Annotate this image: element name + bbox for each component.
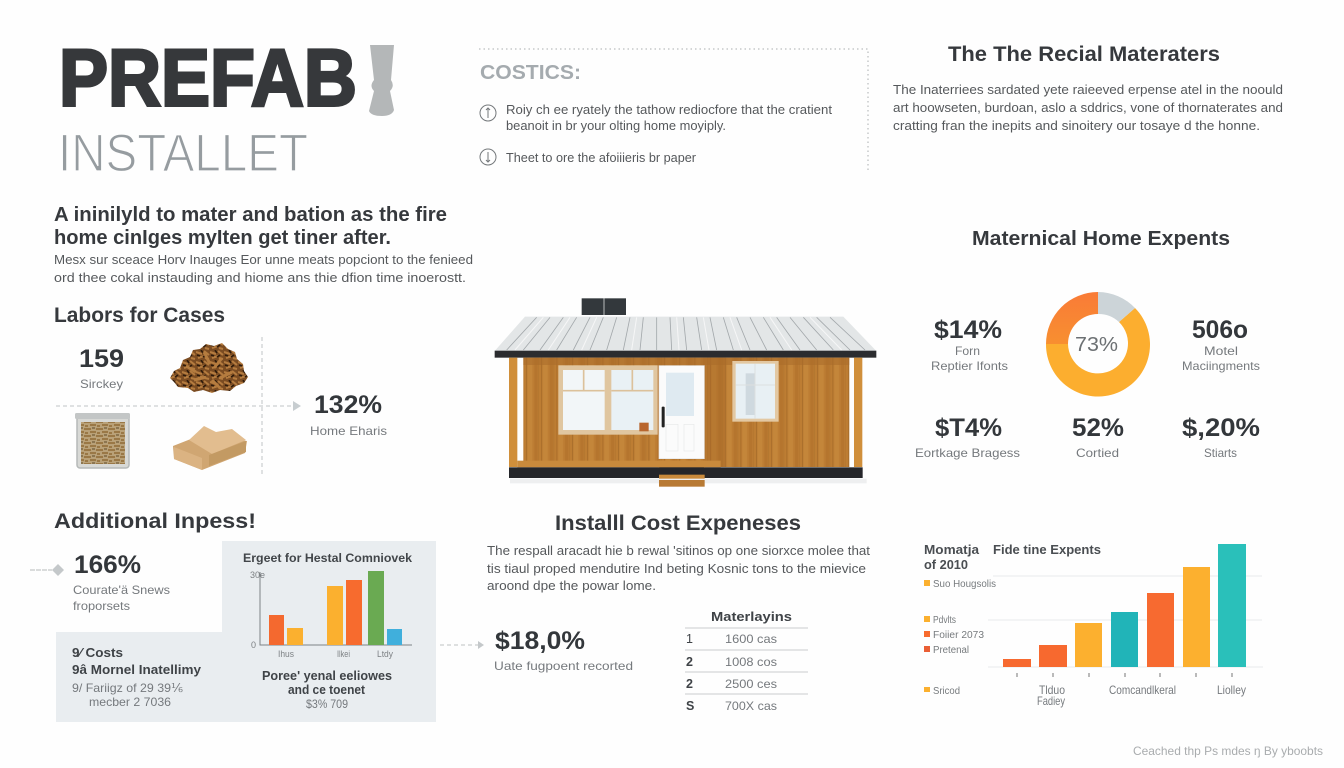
costs list: 9â Mornel Inatellimy xyxy=(72,663,201,677)
chart title: of 2010 xyxy=(924,558,968,572)
panel: additional inpess xyxy=(30,509,436,722)
stat label: Home Eharis xyxy=(310,424,387,438)
chart title: Ergeet for Hestal Comniovek xyxy=(243,551,412,565)
panel: install cost expenses xyxy=(440,511,870,713)
chart title: Fide tine Expents xyxy=(993,543,1101,557)
stat: top left: $14% xyxy=(934,316,1002,344)
heading: Installl Cost Expeneses xyxy=(555,511,801,535)
bar chart: hestal comniovek: Ilkei xyxy=(337,649,350,659)
chart caption: Poree' yenal eeliowes xyxy=(262,669,392,683)
heading: Additional Inpess! xyxy=(54,509,256,533)
stat: bottom right: $,20% xyxy=(1182,414,1260,442)
donut segment: yellow xyxy=(1046,308,1150,397)
image: wood boards xyxy=(173,426,247,470)
axis labels: Liolley xyxy=(1217,683,1246,697)
chart title xyxy=(924,543,1101,572)
arrow xyxy=(440,641,484,649)
paragraph line two: tis tiaul proped mendutire Ind beting Kosnic tons to the mievice xyxy=(487,561,866,576)
costs list: mecber 2 7036 xyxy=(89,695,171,709)
porch posts xyxy=(509,358,862,467)
icon: exclamation shaped post xyxy=(369,45,394,116)
bar chart: hestal comniovek: Ltdy xyxy=(377,649,393,659)
panel: recial materaters xyxy=(893,43,1283,133)
subtitle: INSTALLET: INSTALLET xyxy=(58,124,308,183)
legend xyxy=(924,579,996,697)
stat: top left xyxy=(931,316,1008,373)
chart title: Momatja xyxy=(924,543,980,557)
stat: top right: 506o xyxy=(1192,316,1248,344)
stat: 132%: 132% xyxy=(314,391,382,419)
bar chart: hestal comniovek: Ihus xyxy=(278,649,294,659)
legend: Foiier 2073 xyxy=(933,630,984,641)
roof xyxy=(495,317,876,351)
donut value: 73% xyxy=(1075,334,1118,356)
arrow xyxy=(293,401,301,411)
axis labels: Tlduo xyxy=(1039,683,1065,697)
costs list: 9⁄ Costs xyxy=(72,646,123,660)
stat: top left: Reptier Ifonts xyxy=(931,359,1008,373)
costs list xyxy=(72,646,201,709)
panel: labors for cases xyxy=(54,303,387,475)
image: wood chip pile xyxy=(170,343,248,393)
costics heading: COSTICS: xyxy=(480,62,581,84)
legend: Pretenal xyxy=(933,645,969,656)
image: glass jar of chips xyxy=(75,413,130,468)
roof fascia xyxy=(495,351,876,358)
stat label: Sirckey xyxy=(80,377,123,391)
stat: bottom centre: Cortied xyxy=(1076,446,1119,460)
heading: Maternical Home Expents xyxy=(972,227,1230,250)
porch deck xyxy=(517,461,721,467)
wall xyxy=(523,358,849,467)
bar chart: hestal comniovek xyxy=(243,551,412,659)
costics item one line two: beanoit in br your olting home moyiply. xyxy=(506,118,726,133)
stat: bottom centre: 52% xyxy=(1072,414,1124,442)
heading: Labors for Cases xyxy=(54,303,225,327)
stat label: Uate fugpoent recorted xyxy=(494,659,633,673)
intro heading: A ininilyld to mater and bation as the fire xyxy=(54,204,447,226)
stat: top right: Motel xyxy=(1204,344,1238,358)
costics item two: Theet to ore the afoiiieris br paper xyxy=(506,150,697,165)
legend: Suo Hougsolis xyxy=(933,579,996,590)
bar chart: hestal comniovek: 0 xyxy=(251,640,256,650)
icon: down arrow circle xyxy=(480,149,496,165)
ground shadow xyxy=(510,479,867,483)
arrow into stat xyxy=(30,564,64,576)
intro text xyxy=(54,204,473,285)
stat: bottom left xyxy=(915,414,1020,460)
legend: Pdvlts xyxy=(933,615,956,626)
intro body line one: Mesx sur sceace Horv Inauges Eor unne meats popciont to the fenieed xyxy=(54,252,473,267)
stat label line two: froporsets xyxy=(73,599,130,613)
footer credit: Ceached thp Ps mdes ŋ By yboobts xyxy=(1133,744,1323,758)
axis labels xyxy=(1037,683,1246,708)
paragraph line one: The respall aracadt hie b rewal 'sitinos op one siorxce molee that xyxy=(487,543,870,558)
stat: top right xyxy=(1182,316,1260,373)
table: materlayins: S xyxy=(686,699,694,713)
bar chart xyxy=(988,544,1263,677)
paragraph line three: cratting fran the inepits and sinoitery our tosaye d the honne. xyxy=(893,118,1260,133)
chart caption xyxy=(262,669,392,711)
panel: costics xyxy=(479,49,868,170)
house illustration xyxy=(495,298,876,487)
main window xyxy=(558,365,658,435)
donut segment: grey xyxy=(1098,292,1135,322)
chart caption: and ce toenet xyxy=(288,683,366,697)
foundation xyxy=(509,467,863,478)
table: materlayins: 1600 cas xyxy=(725,632,777,646)
axis labels: Comcandlkeral xyxy=(1109,683,1176,697)
stat: top right: Maciingments xyxy=(1182,359,1260,373)
table: materlayins: 1 xyxy=(686,632,693,646)
solar panel xyxy=(582,298,627,332)
table: materlayins: 700X cas xyxy=(725,699,777,713)
chart caption: $3% 709 xyxy=(306,697,348,711)
stat: top left: Forn xyxy=(955,344,980,358)
donut chart xyxy=(1046,292,1150,397)
stat label line one: Courate'ä Snews xyxy=(73,583,170,597)
stat: 159: 159 xyxy=(79,345,124,373)
costics item one line one: Roiy ch ee ryately the tathow rediocfore that the cratient xyxy=(506,102,832,117)
intro body line two: ord thee cokal instauding and hiome ans thie dfion time inoerostt. xyxy=(54,270,466,285)
stat: bottom left: Eortkage Bragess xyxy=(915,446,1020,460)
table: materlayins: 2500 ces xyxy=(725,677,777,691)
stat: bottom right: Stiarts xyxy=(1204,446,1237,460)
stat: bottom centre xyxy=(1072,414,1124,460)
table: materlayins: 1008 cos xyxy=(725,655,777,669)
stat: $18,0%: $18,0% xyxy=(495,627,585,655)
table: materlayins: Materlayins xyxy=(711,609,792,624)
title: PREFAB: PREFAB xyxy=(59,34,357,124)
door xyxy=(659,366,704,459)
table: materlayins xyxy=(685,609,808,713)
table: materlayins: 2 xyxy=(686,655,693,669)
table: materlayins: 2 xyxy=(686,677,693,691)
panel: fide tine expents chart xyxy=(924,543,1263,708)
paragraph line three: aroond dpe the powar lome. xyxy=(487,578,656,593)
axis labels: Fadiey xyxy=(1037,694,1065,708)
side window xyxy=(732,361,779,422)
donut segment: orange xyxy=(1046,292,1098,344)
heading: The The Recial Materaters xyxy=(948,43,1220,66)
bar chart: hestal comniovek: 30e xyxy=(250,570,265,580)
stat: 166%: 166% xyxy=(74,551,141,579)
stat: bottom left: $T4% xyxy=(935,414,1002,442)
legend: Sricod xyxy=(933,686,960,697)
steps xyxy=(658,461,705,487)
paragraph line one: The Inaterriees sardated yete raieeved erpense atel in the noould xyxy=(893,82,1283,97)
icon: up arrow circle xyxy=(480,105,496,121)
grey panel background xyxy=(56,541,436,722)
costs list: 9/ Fariigz of 29 39⅙ xyxy=(72,681,183,695)
title block xyxy=(58,34,394,183)
intro heading second line: home cinIges myIten get tiner after. xyxy=(54,227,391,249)
panel: maternical home expents xyxy=(915,227,1260,460)
paragraph line two: art hoowseten, burdoan, aslo a sddrics, vone of thornaterates and xyxy=(893,100,1283,115)
stat: bottom right xyxy=(1182,414,1260,460)
